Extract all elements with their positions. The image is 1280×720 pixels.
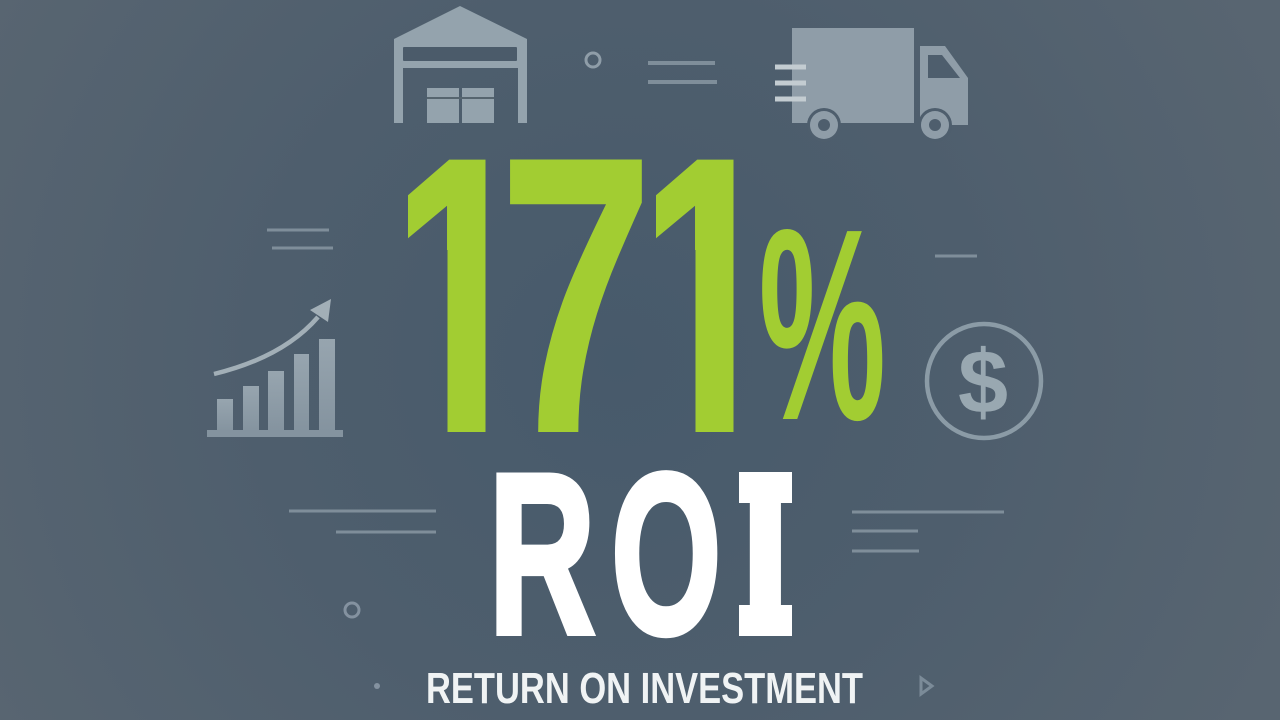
small play triangle bbox=[921, 678, 932, 694]
heading: ROI: R bbox=[488, 425, 596, 682]
big number: 171 percent: 7 bbox=[498, 73, 654, 516]
big number: 171 percent: 1 bbox=[378, 74, 543, 517]
decorative lines left bbox=[267, 230, 333, 248]
decorative lines lower left bbox=[289, 511, 436, 532]
icon: warehouse bbox=[394, 6, 527, 123]
big number: 171 percent bbox=[408, 160, 882, 432]
dash right bbox=[935, 254, 977, 258]
heading: ROI: O bbox=[611, 427, 721, 682]
big number: 171 percent: 1 bbox=[626, 74, 791, 517]
icon: delivery truck bbox=[775, 28, 968, 142]
decorative dashes top bbox=[648, 63, 717, 82]
icon: growth chart with arrow bbox=[207, 299, 343, 437]
decorative lines lower right bbox=[852, 512, 1004, 551]
subtitle: RETURN ON INVESTMENT bbox=[426, 664, 863, 713]
icon: dollar coin: $ bbox=[958, 333, 1008, 433]
small circle lower left bbox=[345, 603, 359, 617]
icon: small circle top bbox=[586, 53, 600, 67]
icon: dollar coin bbox=[927, 324, 1041, 438]
heading: ROI: I bbox=[707, 433, 824, 708]
small dot bbox=[374, 683, 380, 689]
percent sign: % bbox=[759, 174, 886, 478]
infographic canvas bbox=[207, 6, 1044, 704]
heading: ROI bbox=[496, 470, 792, 638]
